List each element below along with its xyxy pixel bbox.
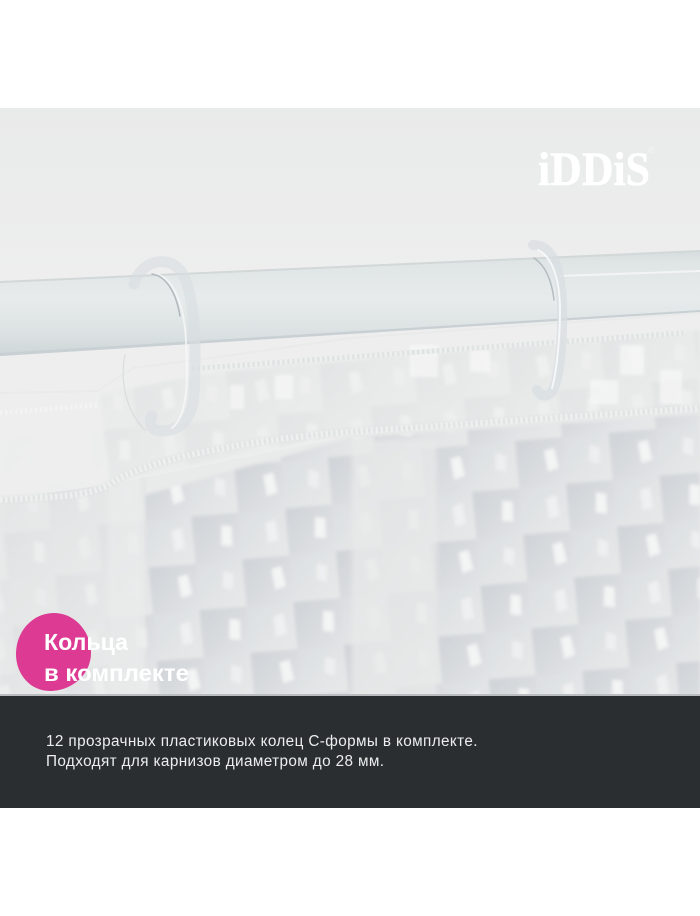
badge heading: Кольца bbox=[44, 629, 128, 655]
caption text bbox=[46, 733, 478, 770]
bright fragments in header bbox=[230, 345, 682, 409]
stitched seam: upper bbox=[0, 333, 683, 413]
soft tiles on the left panel bbox=[0, 420, 145, 696]
bottom edge shade bbox=[0, 694, 700, 696]
badge heading: в комплекте bbox=[44, 660, 189, 686]
curtain header band bbox=[0, 314, 700, 500]
pink blob badge bbox=[16, 613, 91, 691]
curtain body bbox=[0, 312, 700, 700]
logo: iDDiS: iDDiS bbox=[538, 143, 650, 196]
left ring bbox=[123, 262, 195, 431]
washed fold in the centre bbox=[352, 440, 437, 700]
stitched seam: lower bbox=[0, 408, 700, 500]
logo: iDDiS: ® bbox=[648, 145, 655, 155]
right ring bbox=[533, 245, 562, 396]
badge heading bbox=[44, 629, 189, 686]
tile pattern of the 3D fabric bbox=[145, 414, 700, 696]
caption text: Подходят для карнизов диаметром до 28 мм. bbox=[46, 753, 384, 770]
wall background bbox=[0, 108, 700, 696]
dark caption bar bbox=[0, 696, 700, 808]
caption text: 12 прозрачных пластиковых колец С-формы в комплекте. bbox=[46, 733, 478, 750]
photo panel: curtain on rod bbox=[0, 108, 700, 696]
pale fold at the left edge of the panel bbox=[108, 420, 142, 700]
curtain rod bbox=[0, 250, 700, 356]
